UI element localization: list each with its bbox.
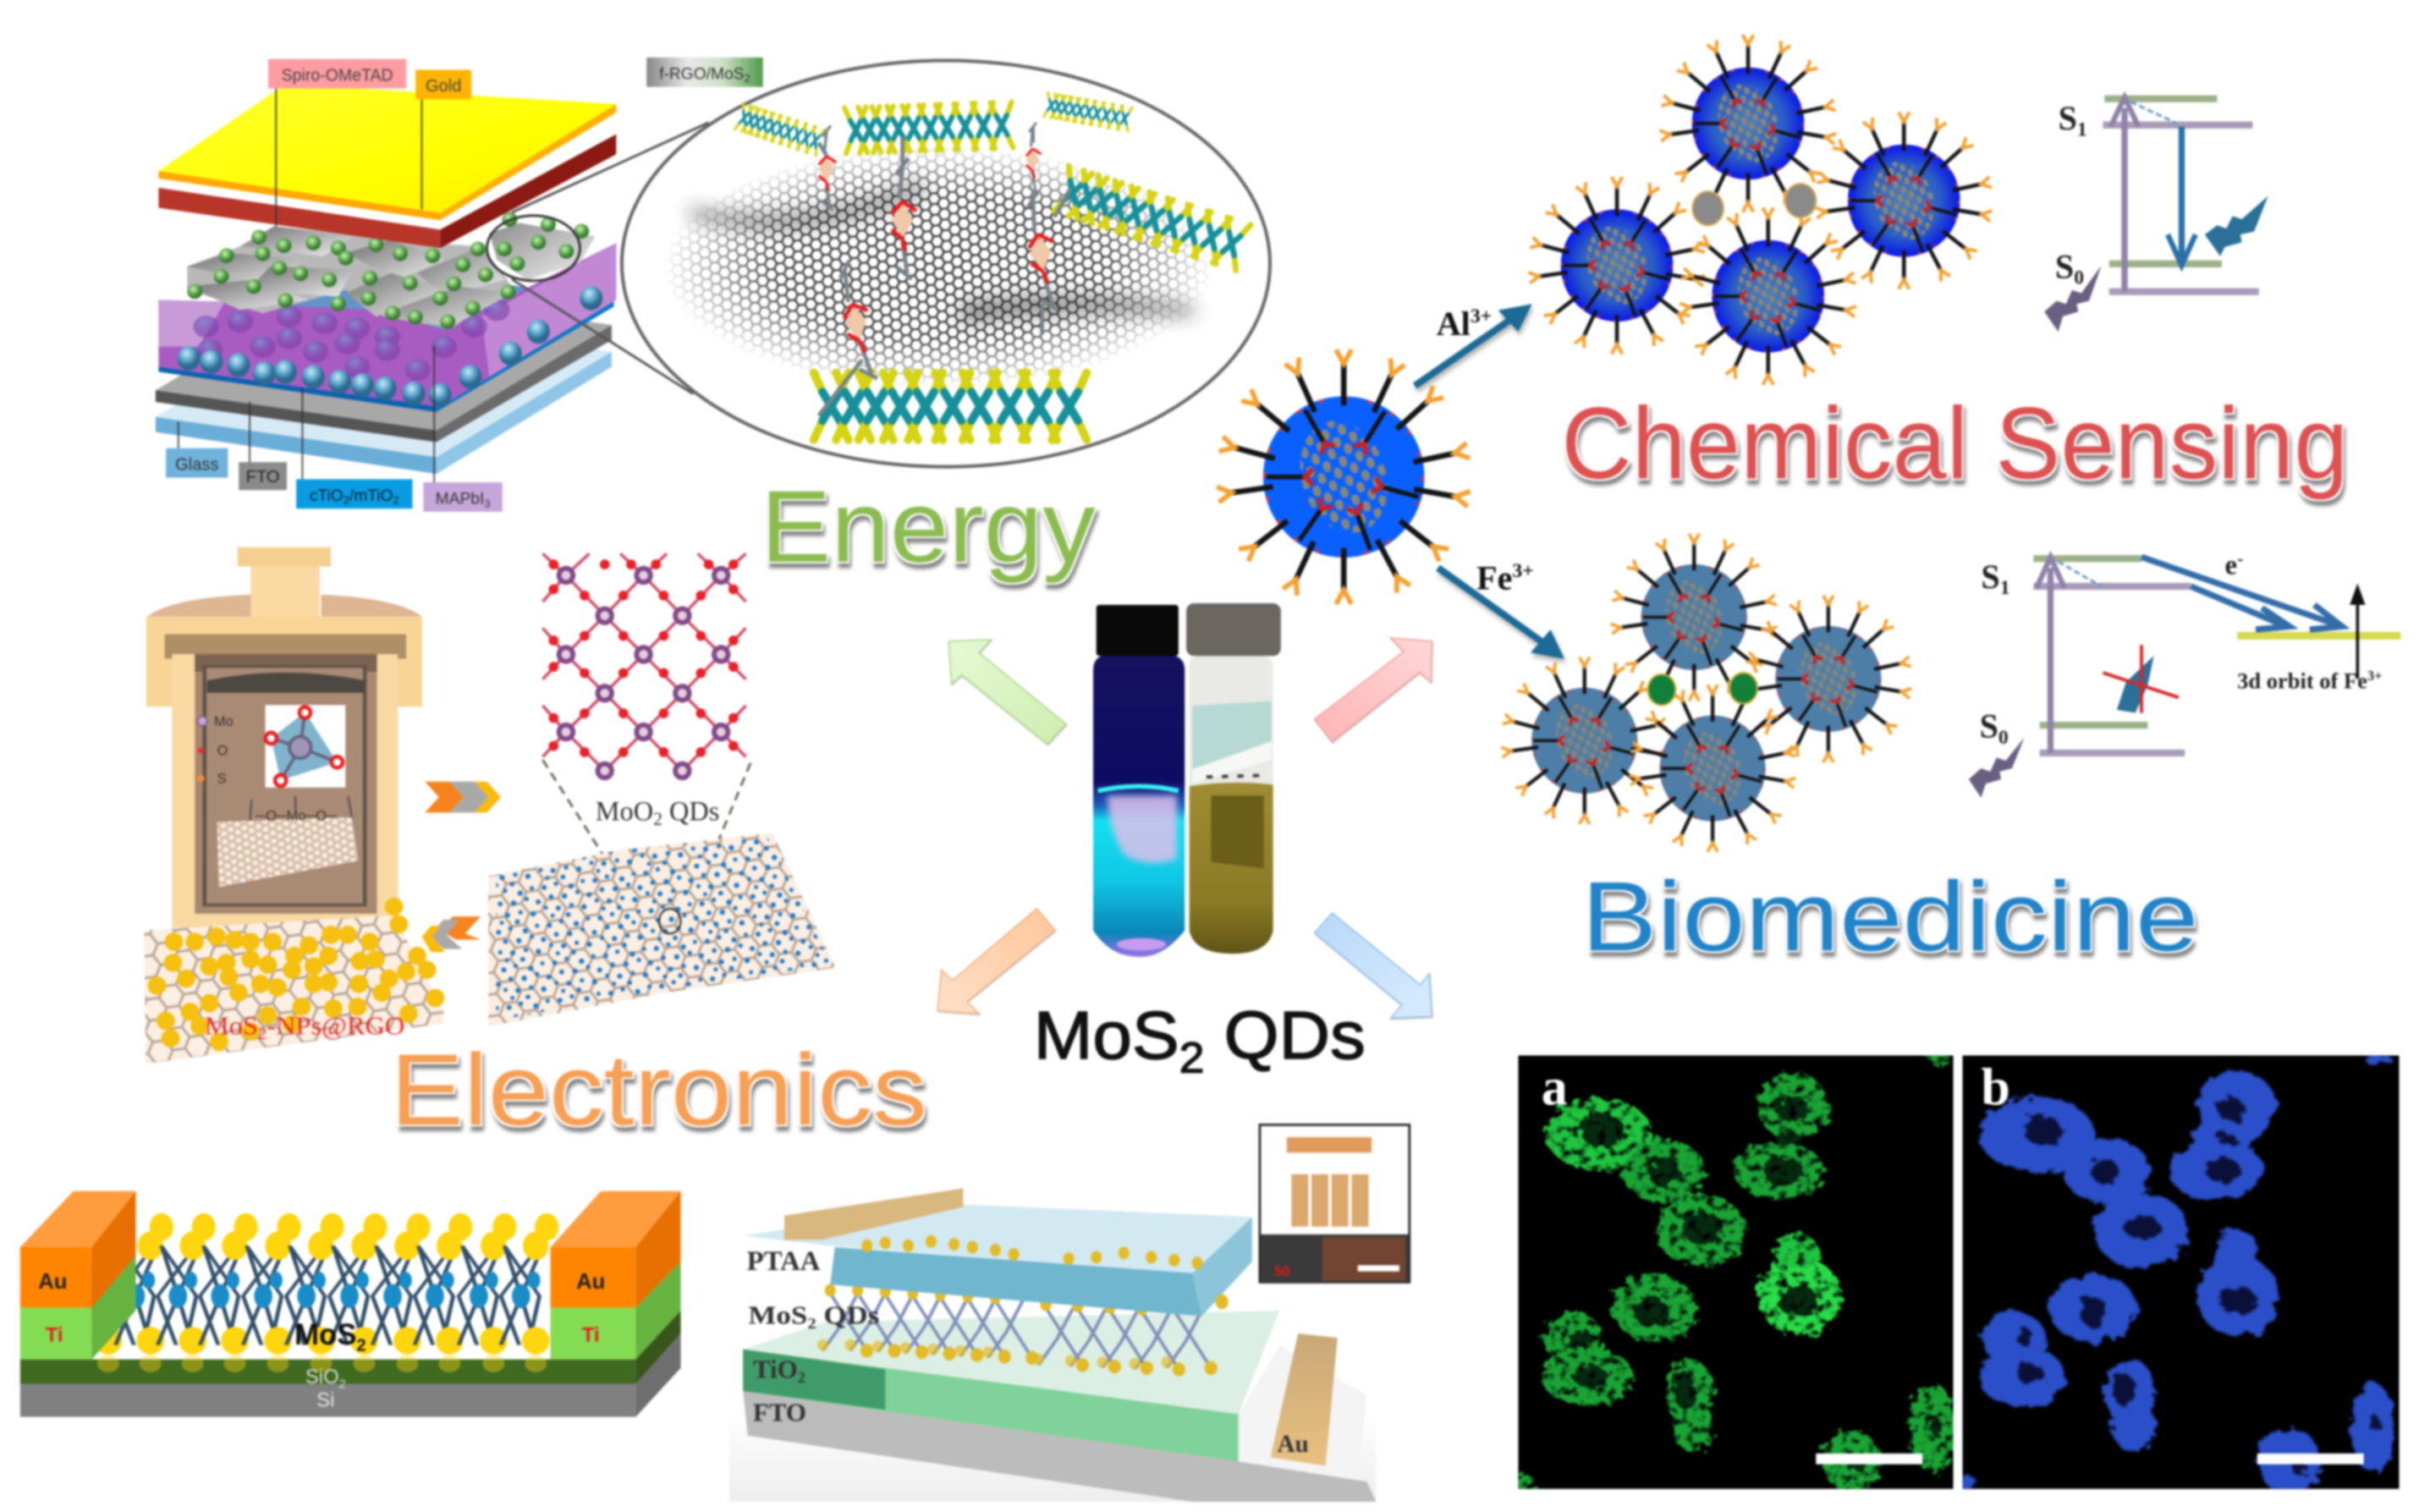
dark photo strip: [1261, 1234, 1409, 1282]
inset frame: [1260, 1124, 1410, 1282]
label: MAPbI3: 3: [484, 497, 490, 509]
label: Gold: [415, 70, 471, 99]
Al ions: [1692, 184, 1816, 225]
yellow nanoparticles: [148, 898, 444, 1051]
label: S1: S: [1981, 558, 2000, 596]
autoclave body: [146, 547, 422, 928]
leader lines: [179, 89, 434, 482]
particle: [1529, 177, 1705, 354]
panel: central QD particle: [1217, 349, 1471, 604]
label: TiO2: 2: [798, 1369, 805, 1386]
arrow: green to Energy: [948, 640, 1066, 745]
scale bar: [1358, 1265, 1399, 1272]
title: MoS2 QDs: 2: [1179, 1033, 1204, 1081]
zoom dashed lines: [542, 760, 750, 927]
panel: zoomed f-RGO / MoS2 circle: [622, 61, 1270, 467]
excitation arrow: [2037, 557, 2064, 753]
label: Glass: Glass: [175, 455, 218, 474]
legend: S: S: [217, 772, 227, 787]
panel: graphene sheet with MoO2 dots: [488, 833, 836, 1026]
excitation arrow: [2111, 97, 2138, 292]
glass and liquid: [1093, 654, 1185, 957]
stack layers: [156, 84, 616, 474]
label: cTiO2/mTiO2: [296, 479, 412, 509]
linker molecules: [819, 123, 1070, 415]
lightning: purple: [1969, 738, 2024, 798]
label: Ti left: Ti: [46, 1323, 63, 1346]
panel: MoS2 transistor device: [20, 1191, 680, 1417]
label: FTO: FTO: [753, 1398, 806, 1427]
copper reflection: [1322, 1238, 1405, 1281]
label: cTiO2/mTiO2: 2: [393, 494, 399, 507]
label: MoS2: MoS: [294, 1318, 357, 1351]
black field: [1963, 1055, 2400, 1489]
heading: Chemical Sensing: Chemical Sensing: [1561, 386, 2348, 500]
blue dots: [496, 838, 831, 1020]
label: MAPbI3: MAPbI: [436, 491, 484, 509]
label: FTO: [239, 462, 287, 490]
label: SiO2: 2: [339, 1377, 346, 1391]
cap: [1186, 603, 1281, 656]
quenched emission: [2103, 645, 2179, 713]
label: Gold: Gold: [426, 77, 461, 96]
legend: Mo: Mo: [214, 714, 234, 729]
label: Au: Au: [1277, 1431, 1309, 1458]
label: f-RGO/MoS2: f-RGO/MoS: [659, 66, 745, 84]
formula: O-Mo-O: ─O─Mo─O─: [255, 809, 337, 824]
legend: O: O: [217, 744, 228, 759]
energy level bars: [2033, 558, 2400, 753]
panel: confocal image b (blue): [1957, 1053, 2400, 1493]
panel: MoS2 NPs on RGO sheet: [144, 898, 444, 1064]
scale bar: [2257, 1454, 2364, 1465]
label: Glass: [166, 448, 228, 478]
legend dots: [197, 717, 207, 782]
relaxation dashes: [2059, 562, 2102, 586]
label: f-RGO/MoS2: 2: [745, 72, 750, 85]
label: MoS2-NPs@RGO: 2: [258, 1025, 267, 1043]
cap: [1097, 605, 1179, 656]
label: MoS2 QDs: QDs: [816, 1300, 879, 1330]
label: Spiro-OMeTAD: Spiro-OMeTAD: [282, 66, 393, 85]
panel: Fe3+ particle cluster: [1501, 534, 1911, 852]
label: Au right: Au: [576, 1270, 605, 1294]
particle: [1680, 208, 1856, 385]
scale bar: [1816, 1454, 1922, 1465]
label: Fe3+: 3+: [1512, 560, 1534, 582]
arrows: four application arrows: [937, 638, 1432, 1018]
particle: [1745, 596, 1911, 762]
particle: [1611, 534, 1777, 701]
label: f-RGO/MoS2: [646, 58, 763, 87]
label: Al3+: Al: [1437, 305, 1471, 343]
lens outline: [622, 61, 1270, 467]
black field: [1518, 1055, 1954, 1489]
label: MoS2-NPs@RGO: MoS: [205, 1010, 256, 1040]
label: MoO2 QDs: MoO: [596, 797, 654, 827]
label: S0: S: [1980, 707, 1998, 745]
red number: 50: [1274, 1264, 1289, 1279]
label: MoS2 QDs: MoS: [748, 1300, 800, 1330]
title: MoS2 QDs: QDs: [1204, 998, 1366, 1074]
hexagon sheet: [488, 833, 836, 1026]
diagram: S1/S0 emission levels: [2044, 97, 2268, 332]
arrow: pink to Chemical Sensing: [1315, 638, 1432, 742]
label: MoS2 QDs: 2: [807, 1315, 816, 1332]
Mo-O tetrahedron: [266, 707, 343, 786]
arrow: to Fe3+ cluster: [1438, 568, 1564, 659]
bonds: [542, 553, 746, 771]
device geometry: [729, 1188, 1376, 1502]
yellow-brown liquid: [1190, 783, 1273, 954]
panel: MoO2 lattice: [542, 553, 750, 927]
label: S0: 0: [1998, 727, 2009, 749]
panel: perovskite QD device: [729, 1124, 1410, 1502]
arrow: blue to Biomedicine: [1315, 913, 1432, 1018]
heading: Electronics: Electronics: [390, 1032, 927, 1146]
label: Al3+: 3+: [1471, 305, 1492, 327]
arrow: to Al3+ cluster: [1415, 304, 1532, 386]
panel letter b: b: [1981, 1059, 2010, 1117]
inset photo: [1260, 1124, 1410, 1282]
label: S1: S: [2059, 99, 2077, 137]
label: cTiO2/mTiO2: cTiO: [310, 487, 344, 505]
magnifier small circle: [487, 216, 580, 281]
arrow: orange to Electronics: [937, 909, 1055, 1014]
glass: [1189, 656, 1273, 954]
sheet shading: [690, 183, 1194, 322]
arrow: orange chevrons right: [425, 782, 501, 812]
label: MoO2 QDs: 2: [653, 808, 662, 829]
graphene sheet: [670, 149, 1207, 384]
oxygen atoms: [548, 559, 739, 757]
device labels: [747, 1246, 1309, 1458]
panel: Al3+ particle cluster: [1529, 35, 1992, 385]
selected spot: [659, 909, 681, 933]
label: PTAA: PTAA: [747, 1246, 821, 1277]
label: Fe3+: Fe: [1476, 559, 1512, 597]
label: Si: Si: [316, 1388, 334, 1411]
relaxation dashes: [2130, 102, 2177, 124]
particle: [1630, 685, 1795, 852]
label: MoS2: 2: [357, 1336, 366, 1355]
heading: Biomedicine: Biomedicine: [1581, 860, 2199, 971]
label: Ti right: Ti: [582, 1323, 600, 1346]
label strip: [1192, 701, 1272, 769]
graphene sheet in vessel: [217, 817, 358, 887]
device geometry: [20, 1191, 680, 1417]
label: S1: 1: [2077, 119, 2087, 141]
diagram: Fe3+ electron transfer levels: [1969, 548, 2400, 798]
photo: daylight vial: [1186, 603, 1281, 954]
label: 3d orbit of Fe3+: 3d orbit of Fe: [2237, 668, 2367, 693]
label: e-: e: [2225, 550, 2237, 580]
label: S1: 1: [2000, 577, 2010, 599]
arrow: orange chevrons left: [421, 916, 481, 952]
emission arrow: [2168, 127, 2196, 266]
panel: confocal image a (green): [1514, 1053, 1955, 1495]
Fe ions: [1648, 673, 1757, 705]
energy level bars: [2103, 99, 2259, 292]
green cells: [1514, 1053, 1955, 1495]
electron transfer arrows: [2141, 557, 2342, 630]
label: FTO: FTO: [246, 468, 280, 487]
lightning: purple: [2044, 266, 2102, 332]
photo: fluorescent vial: [1093, 605, 1185, 957]
label: S0: 0: [2074, 267, 2084, 289]
label: MoO2 QDs: QDs: [662, 797, 719, 827]
panel letter a: a: [1542, 1059, 1568, 1117]
label fold: [1192, 741, 1272, 783]
inner dark reflection: [1211, 795, 1264, 868]
hexagon sheet: [144, 915, 443, 1064]
label: MoS2-NPs@RGO: -NPs@RGO: [267, 1010, 404, 1040]
blue cells: [1957, 1053, 2394, 1493]
label: MAPbI3: [423, 482, 503, 512]
lightning: blue: [2205, 196, 2268, 256]
lavender reflection: [1108, 795, 1177, 863]
label: cTiO2/mTiO2: /mTiO: [349, 487, 393, 505]
particle: [1660, 35, 1836, 212]
label: TiO2: TiO: [753, 1354, 798, 1383]
bottom reflection: [1117, 938, 1166, 951]
panel: hydrothermal autoclave: [146, 547, 422, 928]
molybdenum atoms: [559, 569, 728, 778]
particle: [1816, 112, 1992, 289]
panel: perovskite solar cell stack: [156, 58, 763, 512]
black up arrow: [2350, 583, 2365, 679]
label: Spiro-OMeTAD: [268, 59, 406, 89]
label: 3d orbit of Fe3+: 3+: [2367, 668, 2383, 684]
copper strip: [1287, 1137, 1372, 1152]
particle: [1501, 657, 1668, 824]
dark marks: [1207, 775, 1264, 777]
label: Au left: Au: [38, 1270, 67, 1294]
heading: Energy: Energy: [761, 470, 1096, 584]
title: MoS2 QDs: MoS: [1034, 998, 1174, 1074]
label: S0: S: [2055, 247, 2074, 285]
label: e-: -: [2237, 548, 2243, 569]
MoS2 layers: [735, 93, 1251, 440]
meniscus: [1098, 786, 1179, 791]
label: cTiO2/mTiO2: 2: [344, 494, 349, 507]
label: SiO2: SiO: [305, 1366, 339, 1388]
four gold cells: [1291, 1174, 1368, 1227]
magnifier connector lines: [512, 123, 709, 394]
